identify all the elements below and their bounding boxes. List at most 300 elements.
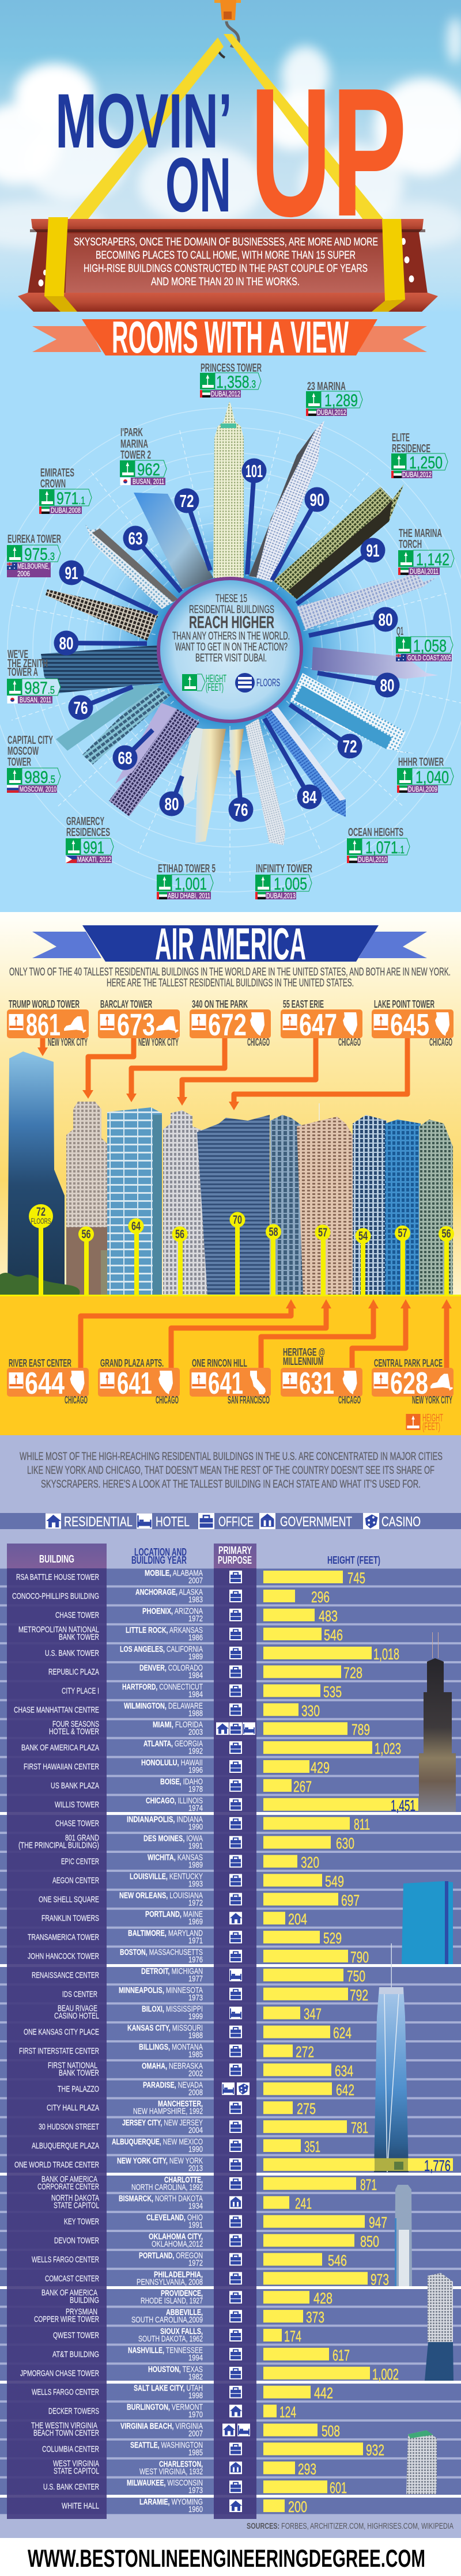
card: One Rincon Hill <box>190 1357 271 1406</box>
row: North Dakota State Capitol: 241 <box>295 2195 312 2212</box>
row: First Hawaiian Center: FIRST HAWAIIAN CENTER <box>24 1762 99 1772</box>
row: Decker Towers <box>48 2403 296 2421</box>
label: Q1 <box>396 625 453 662</box>
row: First Hawaiian Center: HONOLULU, HAWAII <box>141 1758 203 1768</box>
label: Emirates Crown: EMIRATES <box>40 467 74 479</box>
center circle with intro copy: RESIDENTIAL BUILDINGS <box>189 604 274 616</box>
legend: height <box>182 673 226 693</box>
floor numbers: 72 <box>180 491 194 511</box>
label: 23 Marina: 1,289 <box>324 391 358 410</box>
row: U.S. Bank Center: 1973 <box>188 2486 203 2495</box>
row: RSA Battle House Tower: 2007 <box>188 1576 203 1586</box>
label: Capital City Moscow Tower: CAPITAL CITY <box>7 734 53 747</box>
lifting straps <box>69 34 384 220</box>
label: Elite Residence: DUBAI,2012 <box>402 470 432 479</box>
floor pins: 54 <box>358 1230 368 1243</box>
row: Bank of America Building: PROVIDENCE, <box>161 2288 203 2298</box>
row: The Westin Virginia Beach Town Center: VIRGINIA BEACH, VIRGINIA <box>120 2421 203 2431</box>
row: Chase Manhattan Centre: WILMINGTON, DELAWARE <box>124 1701 203 1711</box>
row: 801 Grand: (THE PRINCIPAL BUILDING) <box>18 1841 99 1851</box>
label: Ocean Heights: DUBAI,2010 <box>358 855 387 864</box>
row: Chase Tower, Indianapolis <box>55 1815 370 1833</box>
row: Republic Plaza <box>48 1663 362 1681</box>
row: Chase Manhattan Centre <box>14 1701 320 1719</box>
row: Aegon Center: LOUISVILLE, KENTUCKY <box>130 1871 203 1881</box>
row: City Hall Plaza: MANCHESTER, <box>158 2099 203 2109</box>
row: Devon Tower <box>54 2232 379 2250</box>
row: Bank of America Building: BANK OF AMERICA <box>41 2288 97 2298</box>
label: Gramercy Residences: MAKATI, 2012 <box>77 855 111 864</box>
row: IDS Center: IDS CENTER <box>62 1989 97 1999</box>
label: I'Park Marina Tower 2: BUSAN, 2011 <box>133 477 164 486</box>
label: We've The Zenith Tower A: WE'VE <box>7 648 28 661</box>
row: Four Seasons Hotel & Tower: 789 <box>352 1721 370 1738</box>
intro text <box>74 236 378 288</box>
purpose legend band: OFFICE <box>218 1514 254 1530</box>
row: Chase Tower, Phoenix: PHOENIX, ARIZONA <box>142 1606 203 1616</box>
row: City Hall Plaza <box>47 2099 316 2117</box>
legend: floors <box>235 673 280 693</box>
row: West Virginia State Capitol <box>53 2458 316 2477</box>
row: Transamerica Tower: BALTIMORE, MARYLAND <box>128 1928 203 1938</box>
floor numbers <box>54 459 400 822</box>
label: I'Park Marina Tower 2: TOWER 2 <box>120 449 151 462</box>
row: Bank of America Building <box>41 2288 332 2307</box>
label: Ocean Heights <box>347 826 410 864</box>
label: Emirates Crown: CROWN <box>40 478 66 490</box>
row: Qwest Tower <box>53 2327 301 2345</box>
label: Emirates Crown: DUBAI,2008 <box>51 506 81 515</box>
label: Eureka Tower <box>7 533 61 578</box>
row: Albuquerque Plaza: 1990 <box>188 2144 203 2154</box>
row: Wells Fargo Center, Salt Lake City <box>32 2384 333 2402</box>
row: Comcast Center: PENNSYLVANIA, 2008 <box>137 2277 203 2287</box>
heading banner: air america <box>32 918 427 969</box>
row: Epic Center: 320 <box>301 1854 319 1871</box>
card: Heritage @ Millennium: HERITAGE @ <box>283 1346 325 1358</box>
floor numbers: 63 <box>128 528 143 549</box>
row: US Bank Plaza: US BANK PLAZA <box>51 1781 99 1791</box>
label: Gramercy Residences: 991 <box>83 838 104 857</box>
row: West Virginia State Capitol: WEST VIRGINIA <box>53 2458 99 2468</box>
card: Heritage @ Millennium: MILLENNIUM <box>283 1356 323 1367</box>
row: AT&T Building: AT&T BUILDING <box>52 2350 99 2359</box>
row: One Shell Square: ONE SHELL SQUARE <box>39 1894 99 1904</box>
row: Four Seasons Hotel & Tower: MIAMI, FLORIDA <box>153 1720 203 1730</box>
row: One Shell Square <box>39 1890 360 1909</box>
card: Trump World Tower: 861 <box>26 1008 61 1042</box>
row: Key Tower: 1991 <box>188 2221 203 2230</box>
card: Central Park Place <box>372 1357 454 1406</box>
card: Lake Point Tower: 645 <box>390 1008 429 1042</box>
label: Gramercy Residences <box>66 815 114 864</box>
label: Princess Tower <box>200 362 262 398</box>
row: Chase Tower, Indianapolis: CHASE TOWER <box>55 1819 99 1829</box>
row: AT&T Building: 1994 <box>188 2353 203 2363</box>
row: City Hall Plaza: NEW HAMPSHIRE, 1992 <box>133 2106 203 2116</box>
row: IDS Center: MINNEAPOLIS, MINNESOTA <box>119 1985 203 1995</box>
label: Etihad Tower 5: ETIHAD TOWER 5 <box>158 863 216 875</box>
row: Qwest Tower: QWEST TOWER <box>53 2331 99 2340</box>
label: Capital City Moscow Tower: MOSCOW <box>7 745 39 758</box>
panel: state table background <box>0 1435 461 2538</box>
card: Barclay Tower: 673 <box>117 1008 155 1042</box>
text: CHICAGO <box>247 1037 270 1048</box>
row: Four Seasons Hotel & Tower: FOUR SEASONS <box>52 1719 99 1729</box>
floor pins: 64 <box>131 1220 141 1233</box>
label: Capital City Moscow Tower: 989.5 <box>24 768 55 787</box>
label: Gramercy Residences: RESIDENCES <box>66 826 110 839</box>
row: US Bank Plaza: BOISE, IDAHO <box>160 1777 203 1787</box>
row: 801 Grand: DES MOINES, IOWA <box>143 1834 203 1844</box>
floor pins: 70 <box>233 1213 242 1227</box>
row: John Hancock Tower: 1976 <box>188 1955 203 1965</box>
row: First Interstate Center: 272 <box>296 2043 314 2060</box>
row: North Dakota State Capitol: STATE CAPITOL <box>54 2201 99 2211</box>
floor numbers: 80 <box>59 633 74 653</box>
row: Prysmian Copper Wire Tower <box>34 2307 324 2326</box>
row: West Virginia State Capitol: CHARLESTON, <box>159 2459 203 2469</box>
row: U.S. Bank Center: 601 <box>330 2479 347 2496</box>
label: I'Park Marina Tower 2: I'PARK <box>120 426 143 439</box>
row: Devon Tower: OKLAHOMA,2012 <box>152 2239 203 2249</box>
floor pins: 57 <box>398 1227 407 1240</box>
floor numbers: 101 <box>245 461 263 481</box>
row: JPMorgan Chase Tower: 1,002 <box>372 2366 399 2383</box>
row: JPMorgan Chase Tower: HOUSTON, TEXAS <box>148 2365 203 2374</box>
panel: air america background <box>0 912 461 1295</box>
row: Aegon Center: AEGON CENTER <box>52 1875 99 1885</box>
row: Renaissance Center <box>32 1966 365 1985</box>
row: One Kansas City Place: ONE KANSAS CITY PLACE <box>24 2027 99 2037</box>
center circle with intro copy: THAN ANY OTHERS IN THE WORLD. <box>172 630 290 642</box>
card: Central Park Place: 628 <box>390 1366 428 1401</box>
row: First National Bank Tower: OMAHA, NEBRASKA <box>142 2061 203 2071</box>
row: City Place I: HARTFORD, CONNECTICUT <box>122 1682 203 1692</box>
row: Bank of America Building: RHODE ISLAND, 1927 <box>141 2296 203 2306</box>
row: Bank of America Plaza: BANK OF AMERICA PLAZA <box>21 1743 99 1753</box>
row: Metropolitan National Bank Tower <box>18 1625 343 1644</box>
row: Franklin Towers: FRANKLIN TOWERS <box>41 1913 99 1923</box>
row: Epic Center: 1989 <box>188 1860 203 1870</box>
row: 801 Grand: 801 GRAND <box>65 1833 99 1843</box>
row: 30 Hudson Street: 2004 <box>188 2125 203 2135</box>
panel: sky header background <box>0 0 461 314</box>
floor numbers: 91 <box>65 563 78 583</box>
floor pins: 56 <box>441 1227 451 1240</box>
row: City Hall Plaza: CITY HALL PLAZA <box>47 2103 99 2113</box>
building column: BUILDING <box>39 1553 74 1565</box>
label: Etihad Tower 5: 1,001 <box>175 875 207 894</box>
label: We've The Zenith Tower A: TOWER A <box>7 666 38 679</box>
label: We've The Zenith Tower A: 987.5 <box>24 679 55 698</box>
label: Elite Residence: ELITE <box>392 432 410 444</box>
text: SAN FRANCISCO <box>228 1394 270 1406</box>
row: Franklin Towers <box>41 1909 307 1928</box>
row: Key Tower: KEY TOWER <box>64 2217 99 2227</box>
arrows: top cards to buildings <box>37 1038 407 1110</box>
center circle with intro copy: THESE 15 <box>216 593 247 605</box>
row: Conoco-Phillips Building: ANCHORAGE, ALASKA <box>135 1587 203 1597</box>
text: CHICAGO <box>338 1037 361 1048</box>
row: One Kansas City Place: KANSAS CITY, MISSOURI <box>127 2023 203 2033</box>
row: First National Bank Tower: FIRST NATIONAL <box>48 2060 97 2070</box>
purpose column: PRIMARY <box>218 1545 252 1556</box>
row: U.S. Bank Tower: U.S. BANK TOWER <box>45 1648 99 1658</box>
row: Renaissance Center: 750 <box>347 1968 365 1985</box>
label: Q1: 1,058 <box>413 637 447 656</box>
row: One Kansas City Place: 1988 <box>188 2031 203 2041</box>
label: The Marina Torch <box>398 527 454 576</box>
heading banner: air america: AIR AMERICA <box>155 918 306 969</box>
row: City Place I: 535 <box>323 1683 342 1700</box>
illustration: Willis Tower <box>419 1632 456 1812</box>
arrows: bottom cards to buildings <box>81 1299 452 1369</box>
row: North Dakota State Capitol: NORTH DAKOTA <box>51 2193 99 2203</box>
label: I'Park Marina Tower 2 <box>120 426 167 486</box>
row: Comcast Center: COMCAST CENTER <box>45 2274 99 2283</box>
row: Willis Tower <box>55 1796 418 1814</box>
radial backdrop <box>0 408 461 892</box>
row: The Palazzo: 642 <box>336 2081 354 2098</box>
row: Bank of America Plaza: 1,023 <box>375 1740 401 1757</box>
row: JPMorgan Chase Tower: JPMORGAN CHASE TOWER <box>20 2369 99 2378</box>
table intro text <box>20 1451 443 1491</box>
center circle with intro copy: REACH HIGHER <box>189 613 274 632</box>
card: Grand Plaza Apts.: GRAND PLAZA APTS. <box>100 1357 164 1369</box>
row: 801 Grand: 1991 <box>188 1841 203 1851</box>
row: Republic Plaza: REPUBLIC PLAZA <box>48 1667 99 1677</box>
row: The Westin Virginia Beach Town Center: 2007 <box>188 2429 203 2438</box>
title: MOVIN’ <box>55 78 232 164</box>
row: Albuquerque Plaza: ALBUQUERQUE PLAZA <box>32 2141 99 2151</box>
floor pins: 58 <box>269 1225 278 1239</box>
row: First National Bank Tower: 634 <box>335 2062 353 2079</box>
panel: rooms with a view background <box>0 312 461 912</box>
title <box>55 50 407 255</box>
row: 30 Hudson Street: 781 <box>351 2119 368 2136</box>
row: Prysmian Copper Wire Tower: PRYSMIAN <box>66 2307 97 2317</box>
row: Republic Plaza: DENVER, COLORADO <box>139 1663 203 1673</box>
row: Columbia Center <box>42 2440 384 2458</box>
card: 340 on the Park: 672 <box>208 1008 247 1042</box>
row: First Interstate Center: FIRST INTERSTATE CENTER <box>19 2047 99 2056</box>
row: Chase Tower, Indianapolis: 1990 <box>188 1822 203 1832</box>
label: Emirates Crown <box>39 467 92 515</box>
row: White Hall <box>62 2497 307 2516</box>
section dividers <box>0 1812 461 2498</box>
card: 340 on the Park: 340 ON THE PARK <box>192 998 248 1010</box>
row: Wells Fargo Center, Salt Lake City: WELLS FARGO CENTER <box>32 2388 99 2397</box>
label: Emirates Crown: 971.1 <box>56 489 85 508</box>
row: Metropolitan National Bank Tower: LITTLE ROCK, ARKANSAS <box>126 1625 203 1635</box>
card: Heritage @ Millennium <box>281 1346 362 1406</box>
label: Infinity Tower: INFINITY TOWER <box>256 863 312 875</box>
row: One World Trade Center: 2013 <box>188 2163 203 2173</box>
card: River East Center <box>7 1357 89 1406</box>
row: Qwest Tower: SOUTH DAKOTA, 1962 <box>138 2334 203 2344</box>
row: The Westin Virginia Beach Town Center: 508 <box>322 2422 340 2439</box>
row: Beau Rivage Casino Hotel: CASINO HOTEL <box>54 2011 99 2021</box>
purpose legend band: HOTEL <box>156 1514 190 1530</box>
row: US Bank Plaza: 1978 <box>188 1784 203 1794</box>
row: Aegon Center <box>52 1871 344 1890</box>
intro text: HIGH-RISE BUILDINGS CONSTRUCTED IN THE PAST COUPLE OF YEARS <box>84 263 368 275</box>
row: One World Trade Center: ONE WORLD TRADE CENTER <box>14 2160 99 2170</box>
row: City Place I: 1984 <box>188 1689 203 1699</box>
row: First National Bank Tower: BANK TOWER <box>59 2068 99 2078</box>
row: First National Bank Tower: 2002 <box>188 2068 203 2078</box>
card: One Rincon Hill: ONE RINCON HILL <box>192 1357 247 1369</box>
row: IDS Center: 792 <box>350 1987 368 2004</box>
row: Bank of America Corporate Center <box>37 2174 377 2193</box>
label: Capital City Moscow Tower: MOSCOW, 2010 <box>20 785 56 793</box>
row: 30 Hudson Street: JERSEY CITY, NEW JERSEY <box>122 2118 203 2128</box>
row: Willis Tower: WILLIS TOWER <box>55 1800 99 1810</box>
row: Wells Fargo Center, Portland: PORTLAND, OREGON <box>139 2250 203 2260</box>
row: Chase Manhattan Centre: 1988 <box>188 1708 203 1718</box>
row: Beau Rivage Casino Hotel: BILOXI, MISSISSIPPI <box>142 2004 203 2014</box>
row: AT&T Building: 617 <box>332 2347 350 2364</box>
row: US Bank Plaza: 267 <box>293 1778 312 1795</box>
label: Gramercy Residences: GRAMERCY <box>66 815 104 828</box>
row: U.S. Bank Center <box>43 2478 347 2496</box>
row: AT&T Building: NASHVILLE, TENNESSEE <box>128 2346 203 2355</box>
label: Ocean Heights: 1,071.1 <box>365 838 405 857</box>
row: JPMorgan Chase Tower: 1982 <box>188 2372 203 2382</box>
row: RSA Battle House Tower <box>16 1568 365 1587</box>
label: Princess Tower: PRINCESS TOWER <box>201 362 262 375</box>
row: Conoco-Phillips Building: CONOCO-PHILLIPS BUILDING <box>12 1591 99 1601</box>
row: Franklin Towers: PORTLAND, MAINE <box>145 1909 203 1919</box>
row: The Palazzo <box>58 2080 354 2098</box>
row: Devon Tower: OKLAHOMA CITY, <box>149 2232 203 2241</box>
label: Etihad Tower 5 <box>157 863 216 900</box>
row: Albuquerque Plaza: 351 <box>304 2138 320 2155</box>
row: Transamerica Tower: 1971 <box>188 1936 203 1946</box>
row: One World Trade Center <box>14 2156 453 2174</box>
label: Infinity Tower <box>255 863 312 900</box>
row: White Hall: WHITE HALL <box>62 2501 99 2511</box>
row: Wells Fargo Center, Salt Lake City: 442 <box>314 2385 333 2402</box>
row: First Hawaiian Center: 1996 <box>188 1765 203 1775</box>
label: Elite Residence <box>391 432 448 479</box>
row: Metropolitan National Bank Tower: BANK TOWER <box>59 1632 99 1642</box>
illustration: One World Trade Center <box>374 1943 409 2172</box>
floor pins <box>29 1204 454 1295</box>
row: RSA Battle House Tower: RSA BATTLE HOUSE TOWER <box>16 1572 99 1582</box>
card: Heritage @ Millennium: 631 <box>299 1366 334 1401</box>
row: RSA Battle House Tower: MOBILE, ALABAMA <box>145 1568 203 1578</box>
label: Capital City Moscow Tower: TOWER <box>7 756 31 769</box>
label: Eureka Tower: MELBOURNE, <box>17 562 50 570</box>
row: U.S. Bank Center: MILWAUKEE, WISCONSIN <box>127 2478 203 2488</box>
skyscrapers arranged radially <box>41 402 438 845</box>
floor pins: 56 <box>82 1228 91 1241</box>
row: North Dakota State Capitol <box>51 2193 312 2212</box>
row: John Hancock Tower: JOHN HANCOCK TOWER <box>28 1951 99 1961</box>
label: I'Park Marina Tower 2: MARINA <box>120 438 148 451</box>
row: Epic Center: WICHITA, KANSAS <box>148 1853 203 1862</box>
row: Transamerica Tower: 529 <box>323 1930 342 1947</box>
row: The Westin Virginia Beach Town Center: BEACH TOWN CENTER <box>33 2428 99 2438</box>
row: 801 Grand <box>18 1833 354 1852</box>
row: Key Tower: 947 <box>369 2214 387 2231</box>
table row stripes <box>0 1568 461 2514</box>
row: Devon Tower: DEVON TOWER <box>54 2235 99 2246</box>
purpose legend band: CASINO <box>381 1514 421 1530</box>
row: U.S. Bank Tower: 1,018 <box>373 1646 399 1663</box>
row: AT&T Building <box>52 2346 350 2364</box>
floor numbers: 72 <box>342 736 357 756</box>
label: HHHR Tower: 1,040 <box>415 768 449 787</box>
row: Bank of America Plaza: ATLANTA, GEORGIA <box>143 1739 203 1749</box>
illustration: blue tower <box>402 1881 453 1964</box>
label: The Marina Torch: DUBAI,2011 <box>410 567 439 576</box>
row: First Interstate Center: 1985 <box>188 2050 203 2059</box>
column header: height: HEIGHT (FEET) <box>327 1554 380 1566</box>
row: Epic Center: EPIC CENTER <box>61 1856 99 1867</box>
row: Willis Tower: 1974 <box>188 1803 203 1813</box>
legend: floors: FLOORS <box>256 677 280 689</box>
floor numbers: 80 <box>165 794 179 814</box>
row: Bank of America Corporate Center: CORPORATE CENTER <box>37 2182 99 2192</box>
label: Q1: Q1 <box>396 625 403 638</box>
purpose legend band <box>0 1513 461 1530</box>
row: Devon Tower: 850 <box>360 2233 379 2250</box>
floor-count bubbles <box>66 471 387 810</box>
row: Wells Fargo Center, Salt Lake City: SALT LAKE CITY, UTAH <box>134 2384 203 2393</box>
row: North Dakota State Capitol: 1934 <box>188 2201 203 2211</box>
card: Grand Plaza Apts.: 641 <box>117 1366 152 1401</box>
gold lower panel <box>0 1295 461 1435</box>
text: CHICAGO <box>156 1394 179 1406</box>
floor numbers: 84 <box>302 787 317 807</box>
row: Metropolitan National Bank Tower: 546 <box>324 1626 343 1644</box>
row: Columbia Center: SEATTLE, WASHINGTON <box>130 2440 203 2450</box>
label: Elite Residence: RESIDENCE <box>392 442 430 455</box>
row: Beau Rivage Casino Hotel: 347 <box>304 2006 322 2023</box>
center circle with intro copy <box>158 578 301 721</box>
row: Beau Rivage Casino Hotel <box>54 2004 322 2023</box>
row: US Bank Plaza <box>51 1777 312 1795</box>
air america intro text <box>9 966 451 989</box>
row: Chase Manhattan Centre: 330 <box>301 1702 320 1719</box>
row: 30 Hudson Street: 30 HUDSON STREET <box>39 2122 99 2132</box>
illustration: Columbia Center <box>406 2430 437 2494</box>
card: Trump World Tower <box>7 998 89 1048</box>
row: IDS Center: 1973 <box>188 1993 203 2003</box>
row: Conoco-Phillips Building: 296 <box>311 1588 330 1606</box>
row: First Hawaiian Center <box>24 1758 330 1776</box>
row: One Kansas City Place: 624 <box>333 2025 352 2042</box>
row: Key Tower <box>64 2213 387 2231</box>
card: Trump World Tower: TRUMP WORLD TOWER <box>9 998 80 1010</box>
row: Four Seasons Hotel & Tower: HOTEL & TOWER <box>49 1727 99 1737</box>
row: Columbia Center: COLUMBIA CENTER <box>42 2444 99 2454</box>
label: Eureka Tower: 2006 <box>17 569 30 578</box>
card: 55 East Erie <box>281 998 362 1048</box>
row: Chase Manhattan Centre: CHASE MANHATTAN CENTRE <box>14 1705 99 1715</box>
label: Eureka Tower: EUREKA TOWER <box>7 533 61 546</box>
floor pins: 72 <box>36 1205 46 1219</box>
row: Albuquerque Plaza <box>32 2137 320 2155</box>
row: IDS Center <box>62 1985 368 2004</box>
row: Comcast Center <box>45 2269 389 2288</box>
label: 23 Marina: DUBAI,2012 <box>317 408 346 417</box>
row: RSA Battle House Tower: 745 <box>347 1569 365 1587</box>
row: Bank of America Building: 428 <box>313 2290 332 2307</box>
